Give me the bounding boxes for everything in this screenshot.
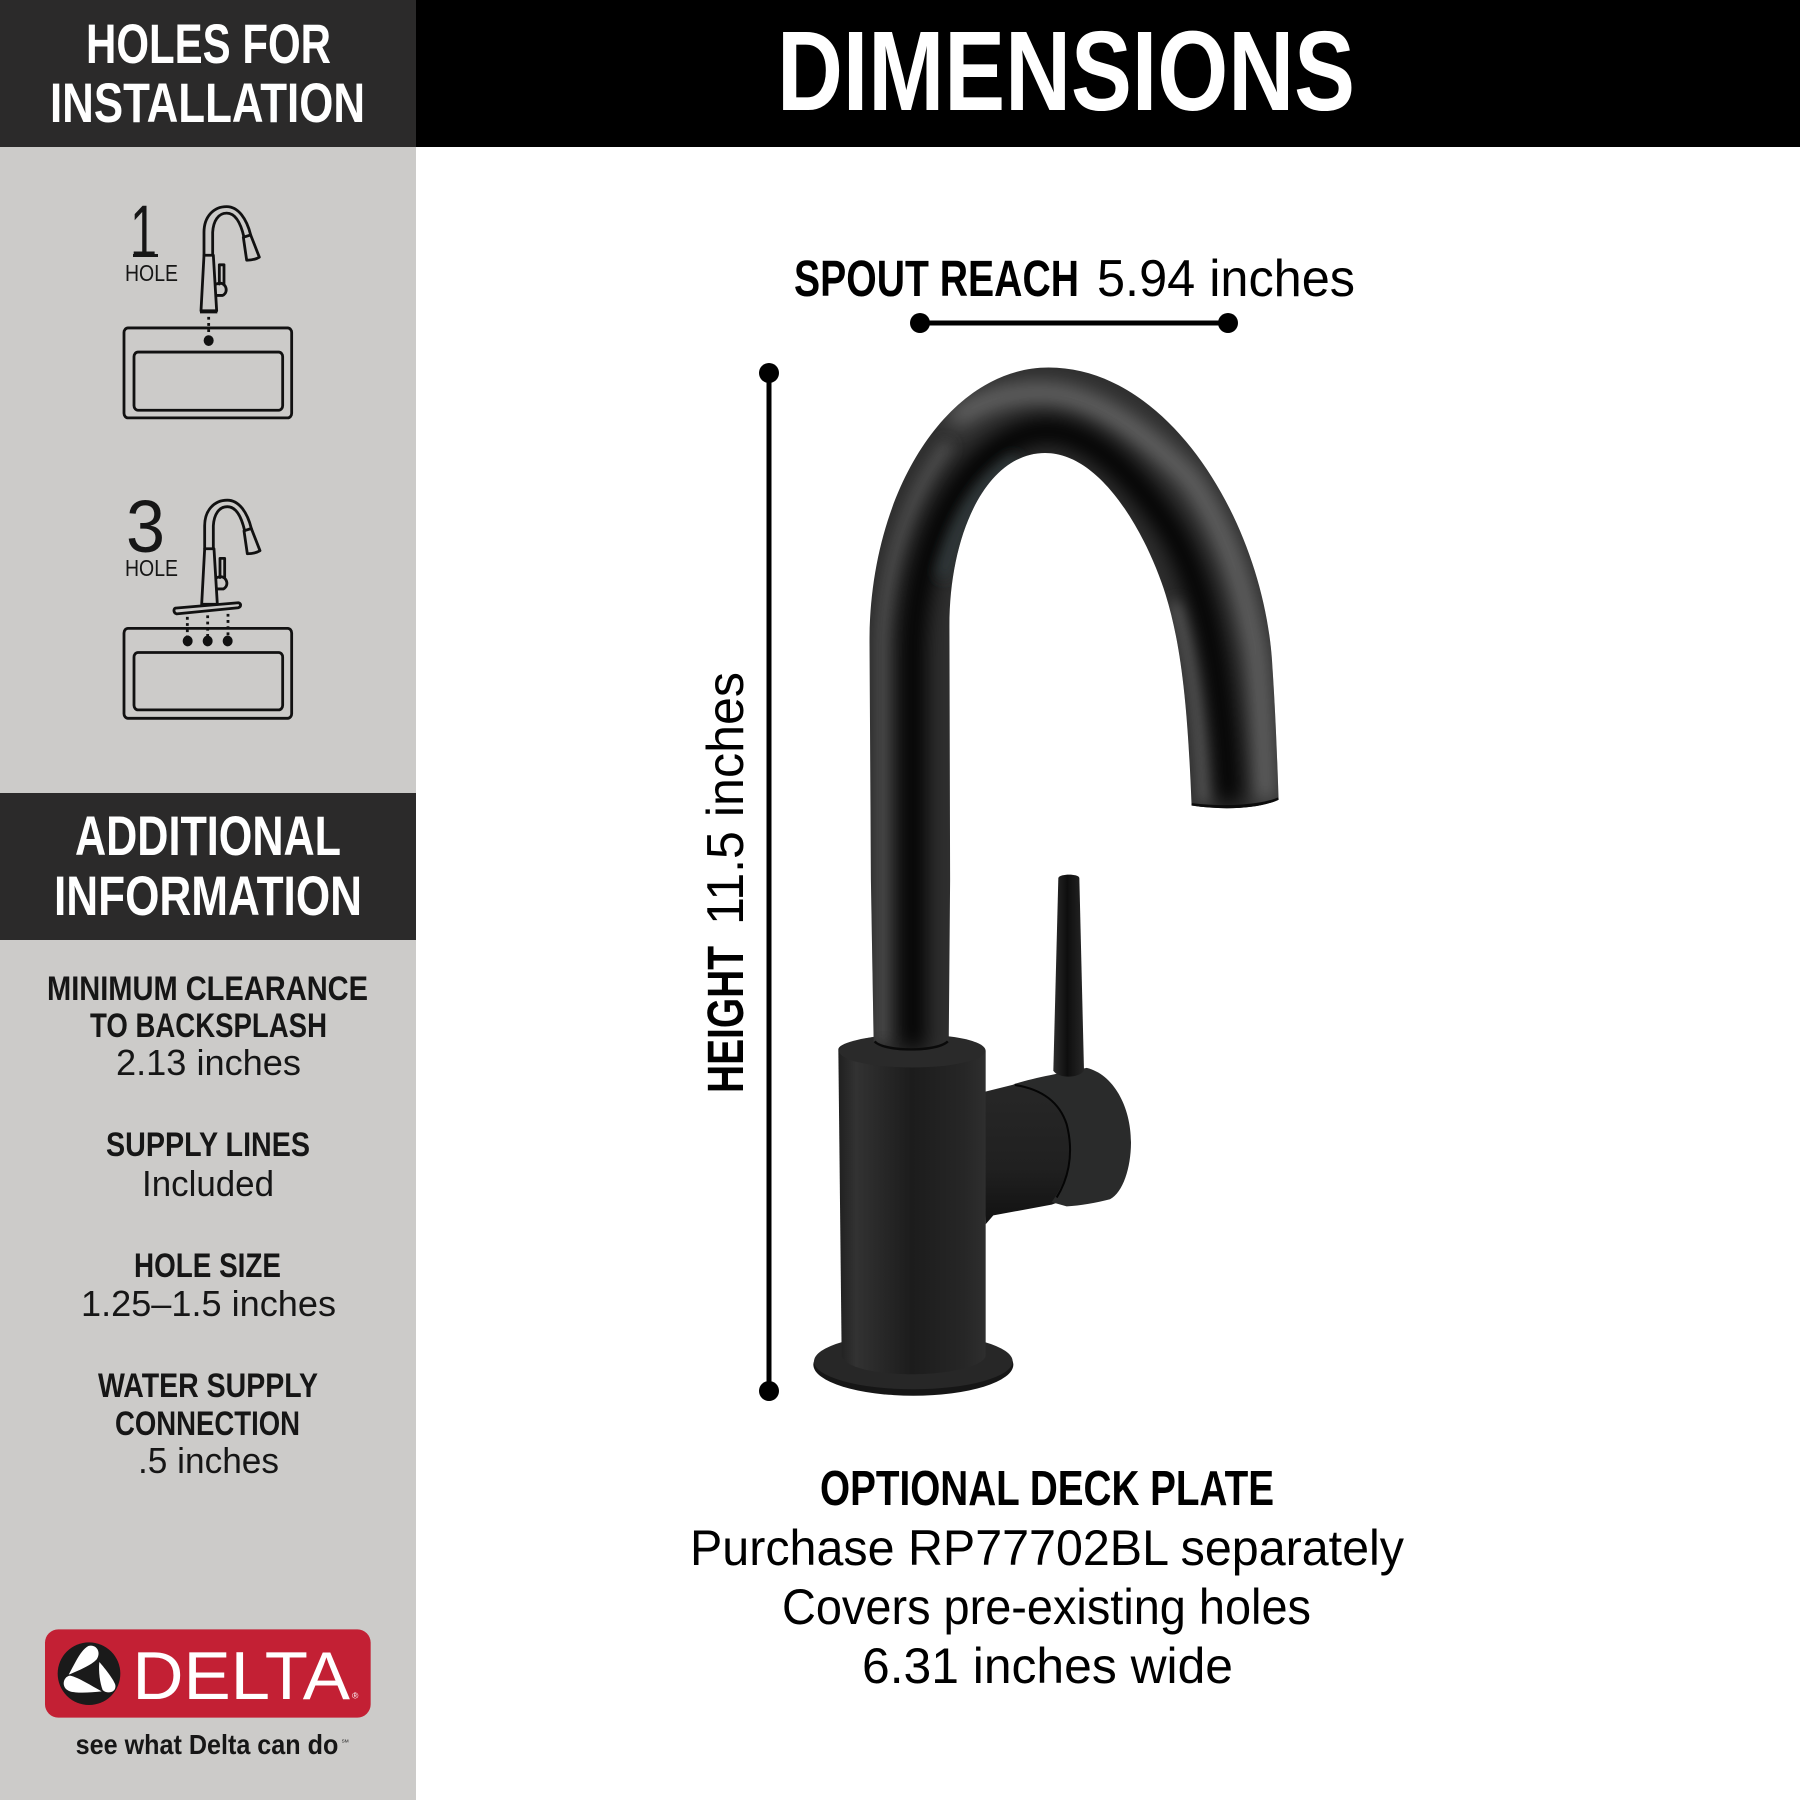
info: water supply connection: WATER SUPPLY	[98, 1367, 318, 1405]
spout reach label: SPOUT REACH	[794, 250, 1079, 307]
header: additional information	[0, 793, 416, 940]
icon: 1 hole installation: HOLE	[125, 260, 178, 286]
info: supply lines: Included	[142, 1163, 274, 1204]
info: minimum clearance to backsplash: TO BACKSPLASH	[90, 1007, 327, 1045]
info: water supply connection	[98, 1367, 318, 1481]
optional deck plate text: Purchase RP77702BL separately	[690, 1520, 1404, 1576]
info: hole size: HOLE SIZE	[134, 1247, 281, 1285]
info: minimum clearance to backsplash: MINIMUM CLEARANCE	[47, 970, 368, 1008]
icon: 3 hole installation: HOLE	[125, 555, 178, 581]
info: minimum clearance to backsplash: 2.13 inches	[116, 1042, 301, 1083]
logo: Delta	[45, 1629, 371, 1760]
dimension line: height	[759, 363, 779, 1401]
optional deck plate text: 6.31 inches wide	[862, 1638, 1233, 1694]
dimension line: spout reach	[910, 313, 1238, 333]
header: holes for installation	[0, 0, 416, 147]
height label: 11.5 inches	[697, 672, 755, 925]
info: minimum clearance to backsplash	[47, 970, 368, 1083]
icon: 1 hole installation	[124, 190, 292, 418]
height label	[697, 672, 755, 1093]
info: water supply connection: .5 inches	[138, 1440, 279, 1481]
title bar: dimensions	[416, 0, 1800, 147]
header: holes for installation: HOLES FOR	[86, 12, 331, 75]
info: hole size: 1.25–1.5 inches	[81, 1283, 336, 1324]
header: additional information: INFORMATION	[54, 864, 362, 927]
logo: Delta: see what Delta can do	[76, 1729, 338, 1760]
icon: 3 hole installation	[124, 485, 292, 718]
logo: Delta: SM	[342, 1739, 349, 1744]
icon: 3 hole installation: 3	[126, 485, 165, 568]
spout reach label	[794, 250, 1355, 308]
logo: Delta: ®	[352, 1691, 359, 1701]
header: holes for installation: INSTALLATION	[50, 71, 365, 134]
info: water supply connection: CONNECTION	[115, 1405, 300, 1443]
height label: HEIGHT	[697, 946, 754, 1093]
info: supply lines	[106, 1126, 310, 1204]
faucet photo	[813, 368, 1279, 1396]
sidebar panel	[0, 0, 416, 1800]
icon: 1 hole installation: 1	[130, 190, 157, 273]
header: additional information: ADDITIONAL	[75, 804, 341, 867]
optional deck plate text: OPTIONAL DECK PLATE	[820, 1462, 1274, 1516]
spout reach label: 5.94 inches	[1097, 250, 1355, 308]
info: supply lines: SUPPLY LINES	[106, 1126, 310, 1164]
info: hole size	[81, 1247, 336, 1324]
optional deck plate text: Covers pre-existing holes	[782, 1579, 1311, 1635]
logo: Delta: DELTA	[132, 1638, 351, 1714]
title bar: dimensions: DIMENSIONS	[777, 8, 1355, 134]
optional deck plate text	[690, 1462, 1404, 1694]
